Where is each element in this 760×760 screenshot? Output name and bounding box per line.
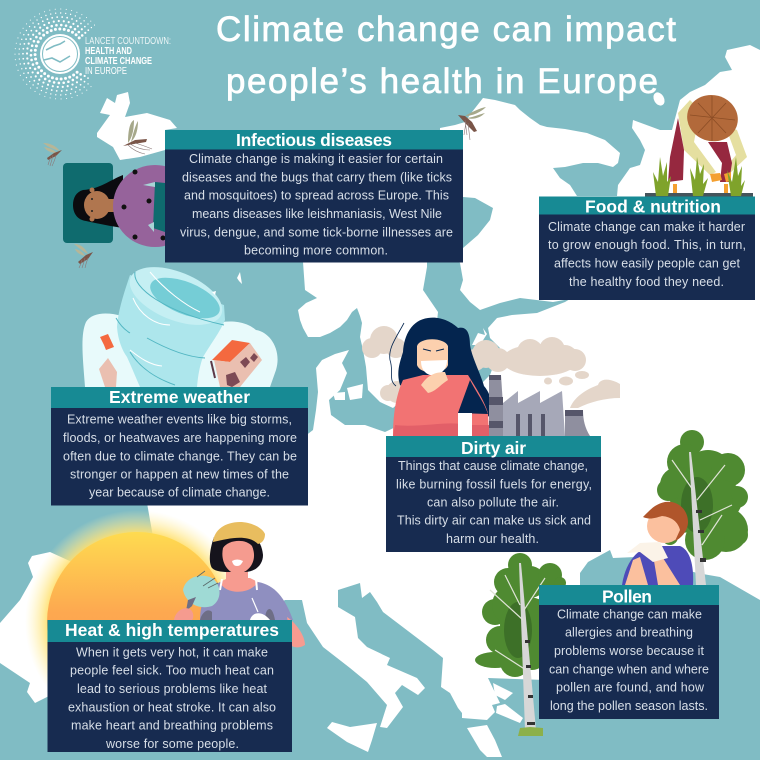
heading: dirty air: Dirty air <box>461 438 526 458</box>
heading: pollen <box>539 585 719 606</box>
text block: infectious diseases: Climate change is making it easier for certain <box>189 152 443 166</box>
logo: Lancet Countdown: LANCET COUNTDOWN: <box>85 36 171 47</box>
text block: extreme weather: Extreme weather events like big storms, <box>67 413 292 427</box>
panel: dirty air <box>386 436 601 552</box>
illustration: tornado <box>82 255 278 387</box>
panel: food and nutrition <box>539 196 755 300</box>
heading: food and nutrition: Food & nutrition <box>585 196 721 216</box>
text block: heat and high temperatures: people feel sick. Too much heat can <box>70 664 274 678</box>
illustration: farmer in field <box>645 89 753 197</box>
text block: heat and high temperatures: exhaustion or heat stroke. It can also <box>68 700 276 714</box>
text block: dirty air: This dirty air can make us sick and <box>397 514 591 528</box>
text block: pollen: long the pollen season lasts. <box>550 699 708 713</box>
text block: infectious diseases: and mosquitoes) to spread across Europe. This <box>184 189 449 203</box>
heading: extreme weather <box>51 387 308 408</box>
text block: heat and high temperatures: worse for some people. <box>105 737 239 751</box>
text block: dirty air: harm our health. <box>446 532 539 546</box>
text block: heat and high temperatures: When it gets very hot, it can make <box>76 645 268 659</box>
panel: heat and high temperatures <box>48 620 292 752</box>
text block: dirty air <box>386 457 601 552</box>
panel: extreme weather <box>51 387 308 506</box>
icon: smoke clouds <box>362 326 620 408</box>
panel: infectious diseases <box>165 130 463 262</box>
illustration: birch tree right <box>657 430 748 585</box>
text block: dirty air: like burning fossil fuels for energy, <box>396 477 592 491</box>
icon: sun <box>47 532 227 712</box>
text block: food and nutrition: Climate change can make it harder <box>548 220 745 234</box>
text block: extreme weather: often due to climate change. They can be <box>63 449 297 463</box>
text block: pollen: can change when and where <box>549 662 709 676</box>
logo: Lancet Countdown: CLIMATE CHANGE <box>85 56 152 67</box>
text block: infectious diseases: virus, dengue, and some tick-borne illnesses are <box>180 225 453 239</box>
heading: infectious diseases <box>165 130 463 150</box>
title <box>216 10 676 101</box>
text block: food and nutrition: affects how easily people can get <box>554 256 741 270</box>
text block: pollen: Climate change can make <box>557 607 702 621</box>
icon: mosquito left <box>43 143 62 166</box>
heading: food and nutrition <box>539 196 755 216</box>
illustration: birch tree left <box>475 553 566 736</box>
heading: heat and high temperatures: Heat & high temperatures <box>65 620 279 640</box>
illustration: sick woman in bed <box>63 163 197 247</box>
logo: Lancet Countdown: IN EUROPE <box>85 66 127 77</box>
text block: food and nutrition <box>539 214 755 300</box>
text block: food and nutrition: the healthy food they need. <box>569 275 724 289</box>
text block: pollen <box>539 605 719 719</box>
title: people’s health in Europe <box>226 62 658 101</box>
sun glow <box>25 510 249 734</box>
text block: extreme weather <box>51 408 308 506</box>
text block: infectious diseases <box>165 150 463 262</box>
illustration: woman coughing with factory <box>362 318 620 436</box>
icon: mosquito lower <box>74 244 93 268</box>
panel: pollen <box>539 585 719 719</box>
heading: dirty air <box>386 436 601 458</box>
text block: heat and high temperatures: make heart and breathing problems <box>71 719 273 733</box>
text block: dirty air: Things that cause climate change, <box>398 459 588 473</box>
text block: heat and high temperatures: lead to serious problems like heat <box>77 682 268 696</box>
heading: pollen: Pollen <box>602 586 652 606</box>
illustration: woman fanning herself in heat <box>174 522 305 647</box>
text block: pollen: pollen are found, and how <box>556 681 705 695</box>
text block: pollen: allergies and breathing <box>565 626 693 640</box>
heading: extreme weather: Extreme weather <box>109 387 250 407</box>
text block: infectious diseases: diseases and the bugs that carry them (like ticks <box>182 170 452 184</box>
text block: extreme weather: stronger or happen at new times of the <box>70 467 289 481</box>
icon: mosquito on Iceland <box>123 120 152 154</box>
icon: mosquito top <box>458 107 486 140</box>
text block: infectious diseases: means diseases like leishmaniasis, West Nile <box>192 207 442 221</box>
text block: infectious diseases: becoming more common. <box>244 244 388 258</box>
logo: Lancet Countdown <box>15 9 171 99</box>
heading: infectious diseases: Infectious diseases <box>236 130 392 150</box>
illustration: boy sneezing <box>622 502 693 585</box>
text block: extreme weather: floods, or heatwaves are happening more <box>63 431 297 445</box>
text block: pollen: problems worse because it <box>554 644 705 658</box>
text block: food and nutrition: to grow enough food. This, in turn, <box>548 238 746 252</box>
text block: dirty air: can also pollute the air. <box>427 495 559 509</box>
title: Climate change can impact <box>216 10 676 49</box>
text block: extreme weather: year because of climate change. <box>89 486 270 500</box>
text block: heat and high temperatures <box>48 642 292 752</box>
logo: Lancet Countdown: HEALTH AND <box>85 46 132 57</box>
